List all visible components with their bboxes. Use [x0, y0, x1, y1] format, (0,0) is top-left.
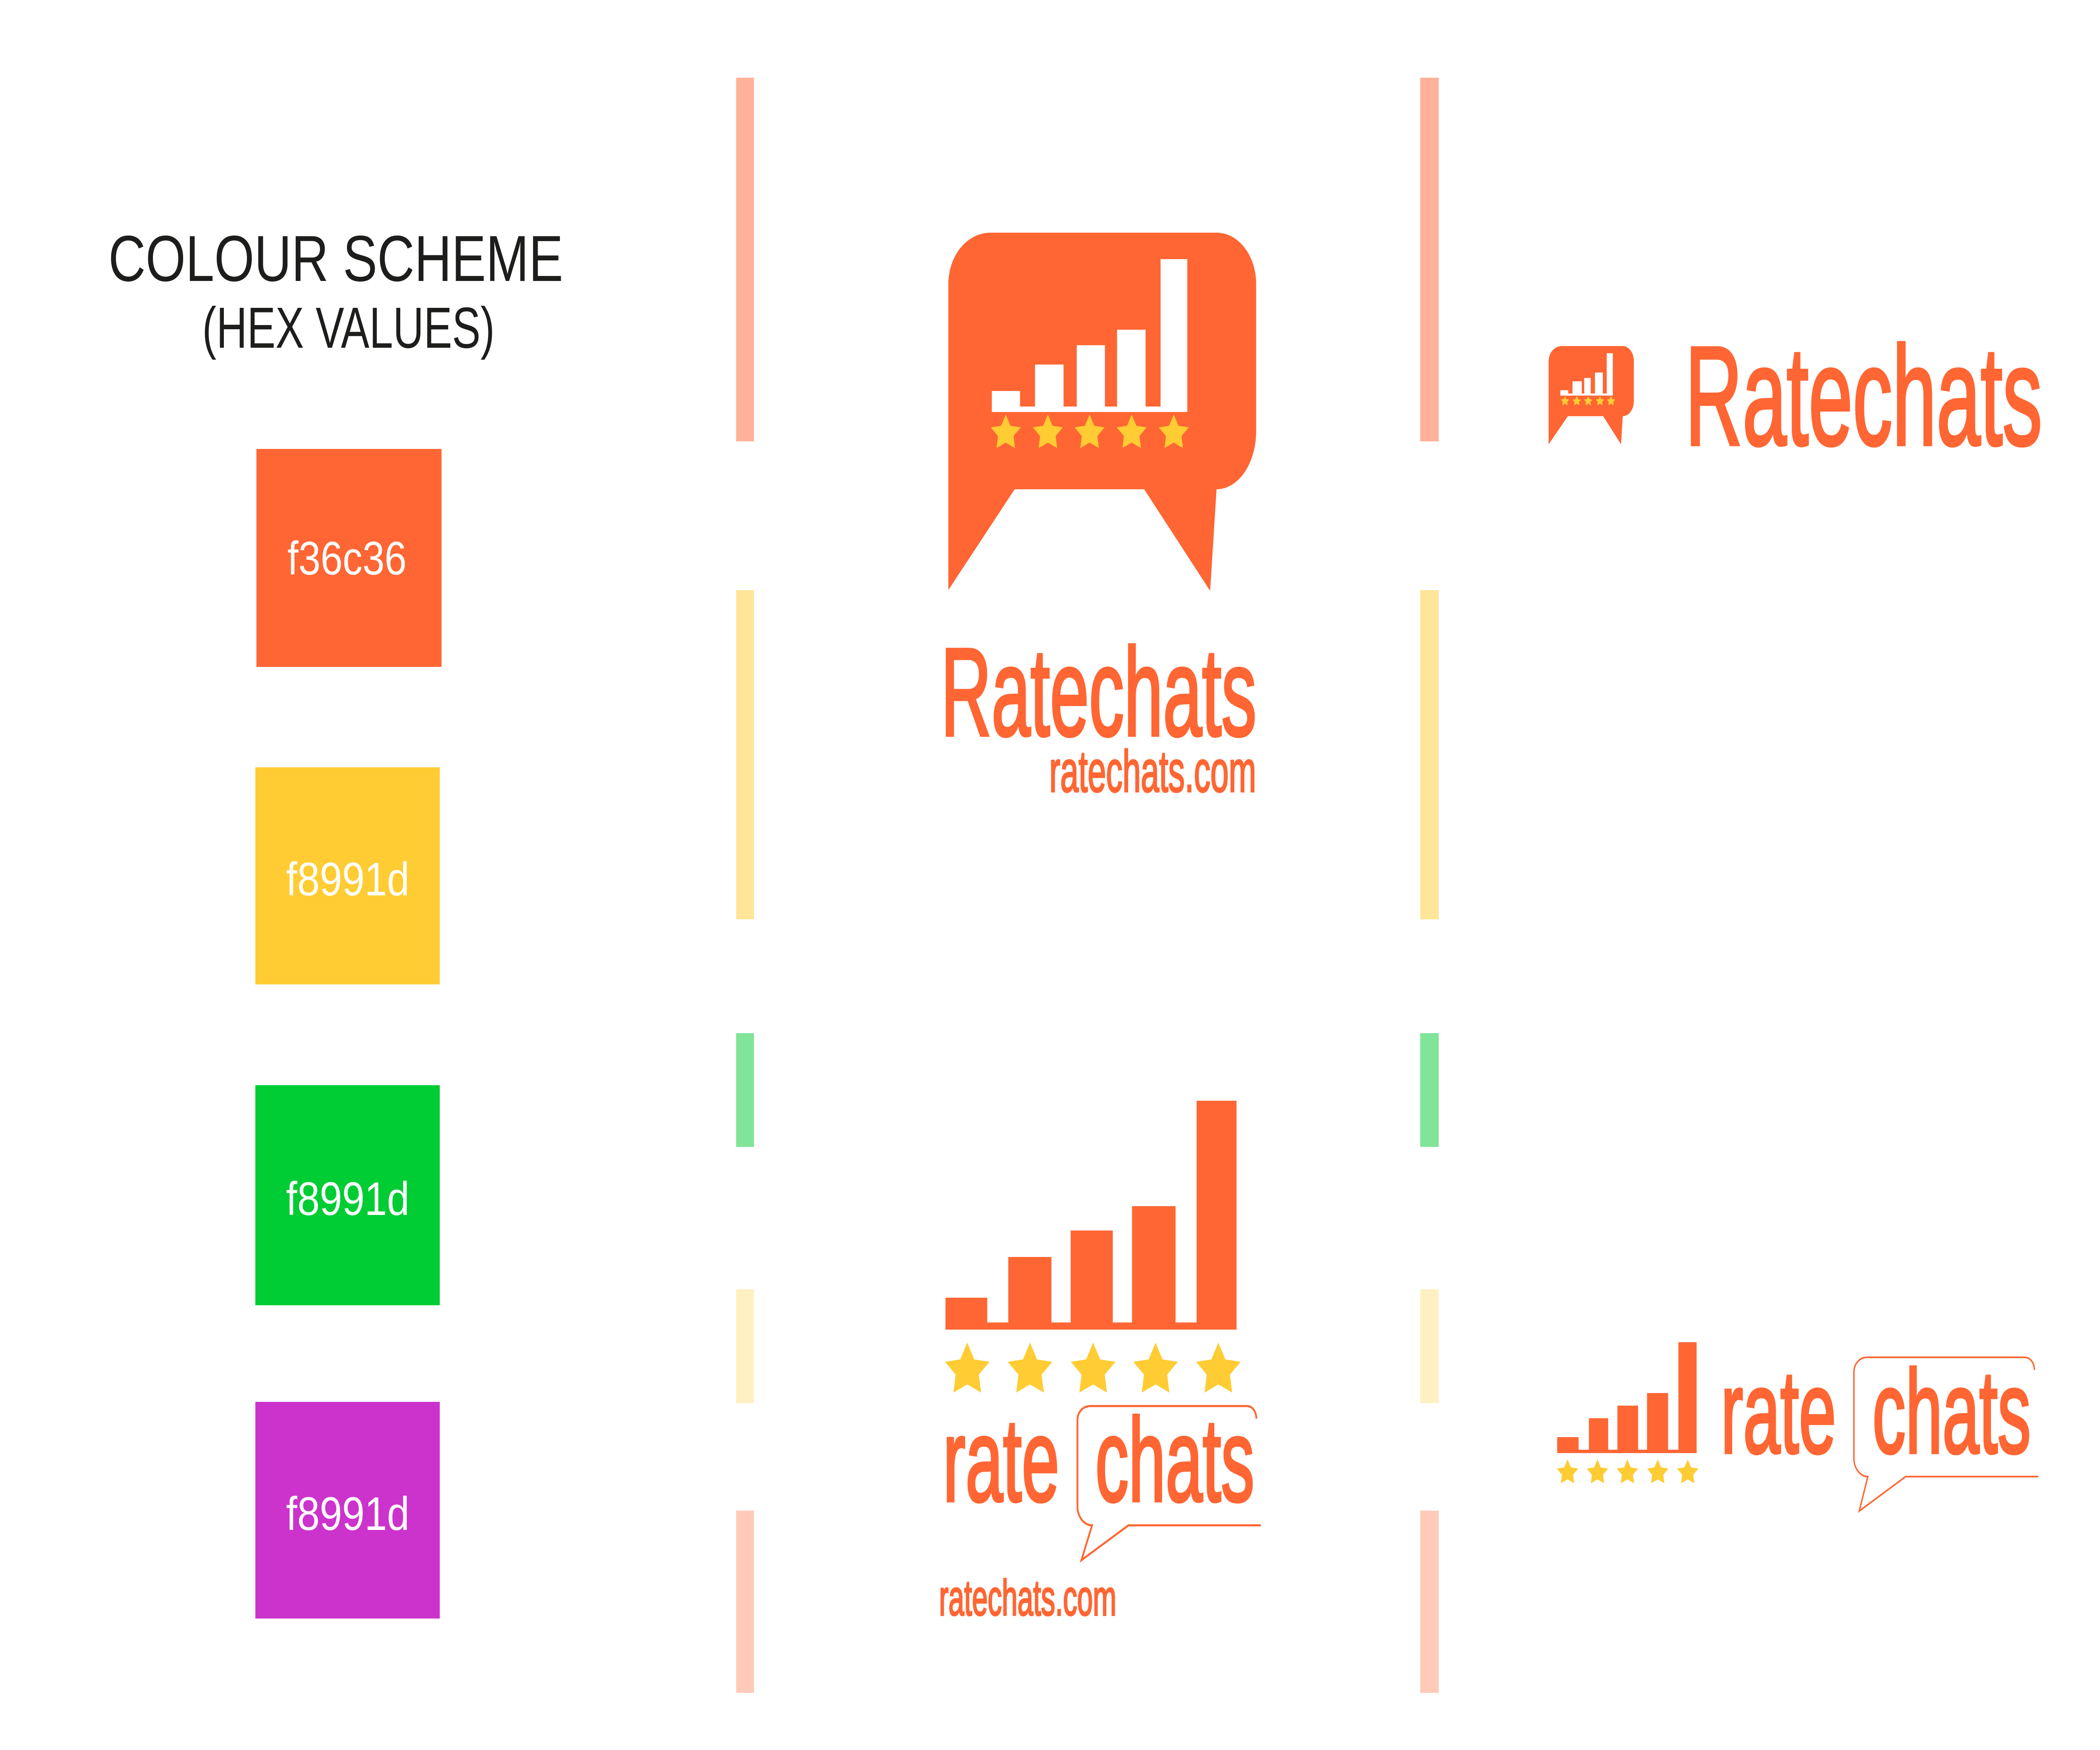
icon: five stars — [945, 1343, 1241, 1393]
icon: five stars — [991, 415, 1189, 448]
icon: speech bubble — [948, 233, 1256, 591]
url: ratechats.com — [1049, 738, 1256, 804]
divider: right colour stripe — [1420, 78, 1439, 1693]
swatch: purple — [255, 1402, 440, 1619]
swatch: green: f8991d — [286, 1173, 410, 1225]
swatch: green — [255, 1085, 440, 1305]
swatch: yellow — [255, 767, 440, 984]
url: ratechats.com — [939, 1569, 1116, 1626]
logo: large speech bubble with wordmark — [941, 233, 1257, 804]
wordmark: chats: chats — [1095, 1394, 1255, 1526]
bar chart: white bars — [992, 259, 1187, 412]
swatch: orange: f36c36 — [287, 533, 407, 585]
logo: horizontal bars, stars and rate chats — [1557, 1342, 2038, 1511]
swatch: purple: f8991d — [286, 1488, 410, 1540]
logo: small horizontal bubble with wordmark — [1549, 317, 2042, 475]
wordmark: Ratechats — [941, 622, 1257, 762]
wordmark: rate: rate — [1721, 1346, 1836, 1478]
logo: stacked bars, stars and rate chats — [939, 1101, 1261, 1626]
bar chart: orange bars — [945, 1101, 1236, 1330]
icon: outlined speech bubble — [1077, 1406, 1261, 1560]
bar chart: white bars — [1560, 353, 1613, 396]
icon: five stars — [1561, 396, 1615, 405]
icon: speech bubble — [1549, 346, 1634, 444]
swatch: orange — [257, 449, 441, 667]
icon: five stars — [1557, 1459, 1698, 1483]
title: colour scheme: COLOUR SCHEME — [108, 223, 563, 295]
wordmark: rate: rate — [943, 1394, 1059, 1526]
title: colour scheme — [108, 223, 563, 360]
title: colour scheme: (HEX VALUES) — [202, 296, 495, 360]
bar chart: orange bars — [1557, 1342, 1697, 1453]
divider: left colour stripe — [736, 78, 754, 1693]
icon: outlined speech bubble — [1854, 1357, 2038, 1511]
swatch: yellow: f8991d — [286, 853, 410, 906]
